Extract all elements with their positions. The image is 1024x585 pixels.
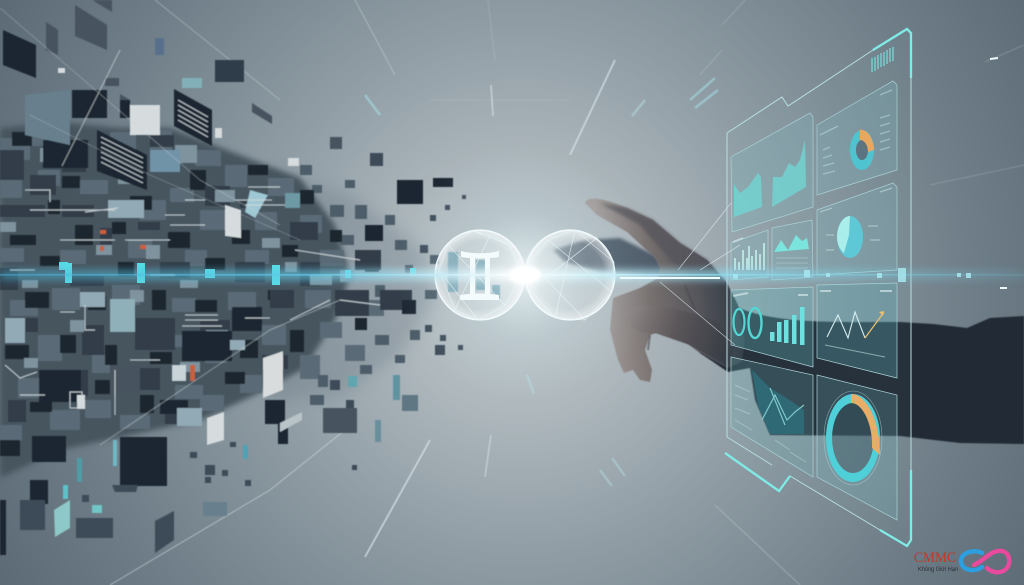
left sphere with gemini symbol (435, 230, 525, 320)
white tiles (58, 68, 302, 445)
card: rings and bars (731, 287, 813, 367)
card: large donut chart (817, 375, 897, 520)
outlying tiles (300, 165, 439, 405)
panel frame (725, 29, 911, 546)
index finger shade (600, 203, 727, 283)
lines from hand to panel (660, 203, 740, 345)
infinity symbol (961, 551, 1009, 572)
data fragments mass (0, 0, 466, 555)
hand silhouette (585, 199, 745, 382)
lower and scattered fragments (20, 153, 466, 553)
thumb (628, 305, 735, 366)
sparse upper fragments (46, 0, 357, 433)
card: area charts (731, 113, 813, 232)
hand (553, 199, 745, 382)
dark slate tiles (0, 135, 412, 424)
card: pie chart (817, 183, 897, 275)
fragment field (0, 0, 466, 555)
central flare glow (395, 145, 655, 405)
sphere debris (448, 252, 500, 299)
card: line chart (817, 283, 897, 378)
sparse outer haze (270, 170, 435, 400)
palm crease (648, 285, 695, 350)
card: dark mountain chart (731, 357, 813, 477)
arm sleeve (700, 300, 1024, 444)
dark tiles (0, 132, 379, 456)
card: mini mountain chart (772, 220, 813, 280)
beam nodes (733, 268, 971, 282)
blue-grey tiles (5, 38, 418, 516)
barcode tick marks (872, 47, 893, 72)
logo wordmark: CMMC (914, 550, 956, 566)
horizontal light beam (0, 58, 1024, 288)
orange data marks (100, 230, 195, 381)
watermark logo (914, 550, 1009, 573)
light tiles (0, 145, 354, 395)
medium tiles (0, 128, 384, 441)
card: donut chart (817, 81, 897, 195)
mass base (0, 122, 350, 478)
right sphere (525, 230, 615, 320)
frame highlights (725, 29, 911, 546)
dashboard panel (725, 29, 911, 546)
teal tiles (54, 375, 400, 537)
text fragment lines (0, 8, 380, 445)
middle finger behind sphere (553, 238, 670, 275)
gemini glyph (460, 251, 499, 300)
facets (439, 231, 522, 320)
dark text panels (0, 30, 453, 555)
card: bar chart (731, 230, 768, 280)
cyan glowing tiles (59, 262, 416, 285)
logo tagline: Không Giới Hạn (918, 566, 958, 573)
